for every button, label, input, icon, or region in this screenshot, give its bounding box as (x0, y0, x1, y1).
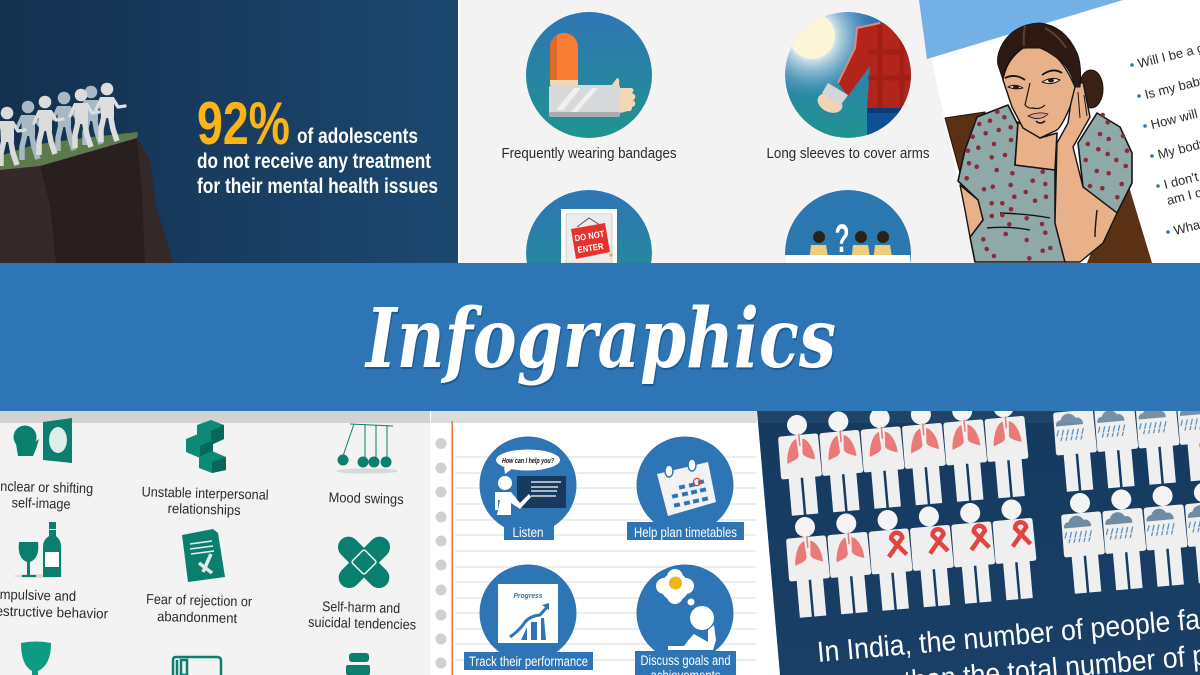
label: fear of rejection or abandonment: Fear of rejection or (146, 591, 253, 609)
label: listen: Listen (512, 525, 544, 540)
icon: notebook (173, 657, 221, 675)
icon: unclear self-image (14, 418, 72, 463)
icon: people at a table with question mark (785, 190, 911, 263)
icon: crossed bandages (338, 536, 390, 588)
icon: wine glass and bottle (14, 522, 62, 578)
pictogram: lung and ribbon figures second row (784, 498, 1040, 618)
pictogram: rain cloud figures top row (1053, 411, 1200, 492)
icon: broken glass (21, 642, 51, 675)
forearm and hand (1055, 82, 1117, 262)
dress folds (971, 213, 1050, 236)
label: unstable interpersonal relationships: Unstable interpersonal (141, 483, 269, 503)
illustration: worried pregnant woman (945, 23, 1152, 263)
blue header strip (919, 0, 1123, 59)
label: unstable interpersonal relationships: relationships (167, 500, 241, 518)
hair (998, 23, 1081, 87)
label: fear of rejection or abandonment (147, 594, 252, 624)
icon: stacked cubes (186, 420, 226, 473)
label: long sleeves to cover arms: Long sleeves to cover arms (766, 145, 930, 162)
icon: pill bottle (346, 653, 370, 675)
label: self-harm and suicidal tendencies: suicidal tendencies (308, 614, 416, 632)
dress body (958, 105, 1065, 262)
icon: long sleeves to cover arms (785, 12, 920, 140)
label: unclear or shifting self-image (1, 481, 92, 512)
icon: do not enter door sign: ENTER (577, 241, 605, 255)
icon: people at a table with question mark: ? (834, 217, 850, 261)
panel: pregnant woman with worries (919, 0, 1200, 263)
statistic: 92 percent: 92% (197, 90, 290, 157)
banner (0, 263, 1200, 411)
title: Infographics (364, 291, 836, 387)
label: unstable interpersonal relationships (142, 486, 268, 518)
label: mood swings: Mood swings (328, 489, 404, 507)
panel: ways to help notebook (431, 411, 757, 675)
label: self-harm and suicidal tendencies (308, 601, 416, 630)
panel: adolescent treatment statistic (0, 0, 458, 263)
icon: progress chart (480, 564, 576, 662)
panel: India illness pictogram (757, 411, 1200, 675)
label: track their performance: Track their performance (469, 654, 588, 669)
icon: calendar timetable (636, 436, 734, 534)
icon: progress chart: Progress (514, 591, 542, 600)
face (1003, 47, 1075, 138)
icon: listen (480, 436, 576, 534)
label: impulsive and destructive behavior (0, 590, 108, 618)
icon: do not enter door sign (526, 190, 652, 263)
illustration: paper figures walking on the cliff edge (0, 83, 125, 166)
label: fear of rejection or abandonment: abandonment (157, 608, 237, 626)
label: unclear or shifting self-image: self-image (11, 494, 71, 512)
illustration: cliff (0, 132, 173, 263)
icon: newton's cradle (336, 424, 398, 474)
icon: rejected document (182, 529, 225, 582)
neck and chest (1015, 122, 1057, 170)
statistic description: of adolescents (297, 125, 418, 148)
label: self-harm and suicidal tendencies: Self-harm and (322, 598, 400, 616)
statistic description: for their mental health issues (197, 175, 438, 198)
dress dots (964, 109, 1129, 261)
icon: do not enter door sign: DO NOT (574, 229, 606, 243)
panel: warning signs (460, 0, 974, 263)
facial features (1005, 70, 1062, 80)
text: worries list (1130, 46, 1200, 234)
right sleeve (1078, 113, 1132, 213)
icon: thinking about goals (636, 564, 734, 662)
statistic description: do not receive any treatment (197, 150, 431, 173)
icon: frequently wearing bandages (526, 12, 652, 138)
pictogram: lung figures top row (778, 411, 1028, 516)
left arm (960, 185, 983, 237)
panel: borderline personality symptoms (0, 411, 431, 675)
label: discuss goals and achievements: Discuss goals and (640, 653, 730, 668)
label: frequently wearing bandages: Frequently wearing bandages (502, 145, 676, 162)
label: help plan timetables: Help plan timetables (634, 525, 737, 540)
statistic description (197, 125, 438, 198)
pictogram: rain cloud figures second row (1059, 481, 1200, 594)
label: listen (504, 522, 554, 540)
icon: listen: How can I help you? (502, 458, 555, 465)
label: discuss goals and achievements (635, 651, 736, 675)
